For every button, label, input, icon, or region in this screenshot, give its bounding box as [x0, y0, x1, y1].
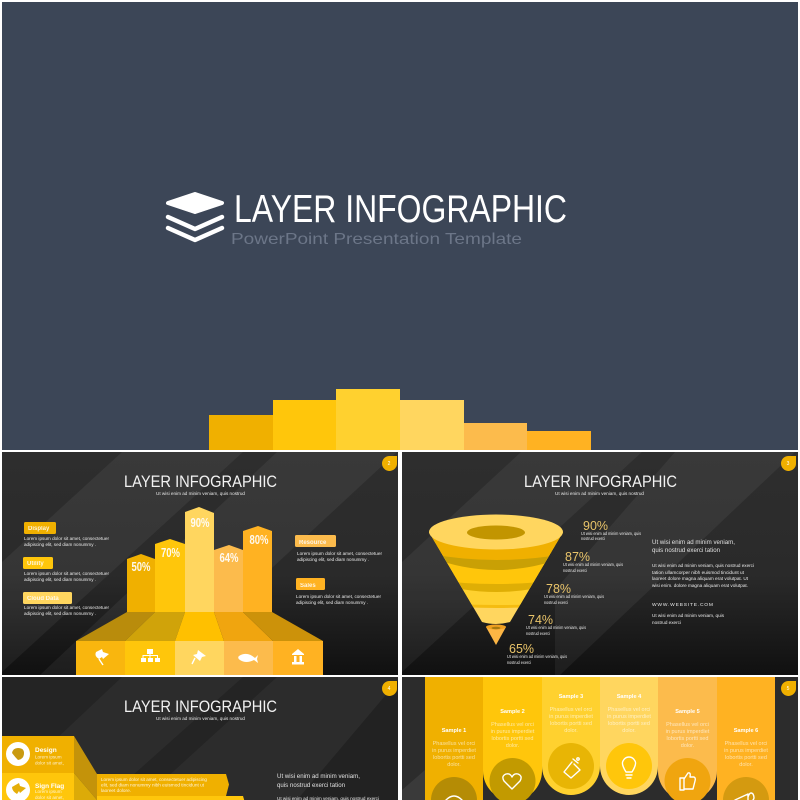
stat 78%: nostrud exerci	[544, 600, 568, 606]
label: Display: Lorem ipsum dolor sit amet, consectetuer	[24, 536, 109, 542]
label: Sales	[296, 578, 381, 606]
bar 50%	[127, 554, 155, 612]
column: Sample 4: in purus imperdiet	[607, 714, 651, 720]
stat 90%: nostrud exerci	[581, 536, 605, 542]
badge: slide number 4: 4	[388, 686, 391, 692]
badge: slide number 5: 5	[787, 686, 790, 692]
column: Sample 2: Sample 2	[500, 709, 525, 715]
label: Utility: adipiscing elit, sed diam nonummy .	[24, 577, 96, 583]
bar 90%: 90%	[190, 515, 210, 530]
stat 65%	[507, 644, 567, 664]
column: Sample 3	[542, 677, 600, 795]
column: Sample 1: lobortis portti sed	[433, 755, 475, 761]
panel: stair list slide	[2, 677, 398, 800]
bar 90%	[185, 507, 214, 612]
column: Sample 4: dolor.	[622, 728, 636, 734]
icon: airplane	[238, 654, 258, 663]
column: Sample 6: Sample 6	[734, 728, 758, 734]
side text block: wisi enim. dolore magna aliquam erat volutpat.	[652, 583, 748, 589]
badge: slide number 2: 2	[388, 461, 391, 467]
column: Sample 4: lobortis portti sed	[608, 721, 650, 727]
side text block: quis nostrud exerci tation	[652, 547, 720, 554]
label: Display	[24, 522, 109, 548]
arrow bar 1: laoreet dolore.	[101, 788, 131, 793]
icon: push pin	[192, 650, 206, 664]
label: Cloud Data	[23, 592, 109, 617]
side text block: Ut wisi enim ad minim veniam,	[652, 539, 735, 546]
side text block	[277, 773, 379, 800]
column: Sample 1: in purus imperdiet	[432, 748, 476, 754]
stat 87%: Ut wisi enim ad minim veniam, quis	[563, 562, 623, 568]
cover title: LAYER INFOGRAPHIC	[234, 188, 567, 231]
arrow bar 2	[97, 796, 246, 800]
label: Cloud Data: Cloud Data	[27, 596, 59, 602]
badge: slide number 3: 3	[787, 461, 790, 467]
column: Sample 4	[600, 677, 658, 795]
label: Resource: Resource	[299, 540, 327, 546]
column: Sample 3: Sample 3	[559, 694, 583, 700]
arrow bar 1	[97, 774, 229, 796]
panel: bar chart slide	[2, 452, 398, 675]
stat 74%: 74%	[528, 613, 553, 627]
stair step: Design: dolor sit amet,	[35, 760, 64, 766]
panel: sample columns slide	[402, 677, 798, 800]
title: LAYER INFOGRAPHIC	[524, 473, 677, 491]
funnel	[429, 514, 563, 645]
stat 87%: nostrud exerci	[563, 568, 587, 574]
column: Sample 5: Sample 5	[675, 709, 700, 715]
column: Sample 4: Phasellus vel orci	[608, 707, 650, 713]
bar 70%: 70%	[161, 545, 180, 560]
column: Sample 2: in purus imperdiet	[491, 729, 535, 735]
column: Sample 3: dolor.	[564, 728, 578, 734]
label: Display: adipiscing elit, sed diam nonummy .	[24, 542, 96, 548]
stair step: Sign Flag: Sign Flag	[35, 783, 64, 790]
column: Sample 2: lobortis portti sed	[492, 736, 533, 742]
front blocks	[76, 641, 323, 675]
column: Sample 6: lobortis portti sed	[725, 755, 767, 761]
label: Utility	[23, 557, 109, 583]
column: Sample 5: lobortis portti sed	[667, 736, 708, 742]
column: Sample 1: dolor.	[447, 762, 461, 768]
perspective floor	[76, 612, 323, 641]
stat 74%: Ut wisi enim ad minim veniam, quis	[526, 625, 586, 631]
badge: slide number 3	[781, 456, 796, 471]
bar 80%: 80%	[250, 532, 269, 547]
arrow bar 1: Lorem ipsum dolor sit amet, consectetuer adipiscing	[101, 777, 207, 782]
column: Sample 6: dolor.	[739, 762, 753, 768]
stat 78%: 78%	[546, 582, 571, 596]
stair step: Design: Lorem ipsum	[35, 754, 62, 760]
stat 65%: 65%	[509, 642, 534, 656]
arrow bar 1: elit, sed diam nonummy nibh euismod tincidunt ut	[101, 782, 205, 788]
badge: slide number 4	[382, 681, 397, 696]
column: Sample 3: Phasellus vel orci	[550, 707, 592, 713]
side text block: laoreet dolore magna aliquam erat volutpat. Ut	[652, 576, 749, 582]
cover subtitle: PowerPoint Presentation Template	[231, 231, 522, 248]
stat 90%: Ut wisi enim ad minim veniam, quis	[581, 531, 641, 537]
label: Sales: Sales	[300, 583, 316, 589]
side text block: Ut wisi enim ad minim veniam, quis nostrud exerci	[652, 563, 754, 569]
side text block: nostrud exerci	[652, 620, 681, 626]
stat 90%: 90%	[583, 519, 608, 533]
bar 80%	[243, 526, 272, 612]
subtitle: Ut wisi enim ad minim veniam, quis nostrud	[156, 716, 245, 722]
column: Sample 5: in purus imperdiet	[666, 729, 710, 735]
label: Sales: Lorem ipsum dolor sit amet, consectetuer	[296, 594, 381, 600]
column: Sample 2: dolor.	[506, 743, 520, 749]
column: Sample 6: in purus imperdiet	[724, 748, 768, 754]
panel: funnel slide	[402, 452, 798, 675]
title: LAYER INFOGRAPHIC	[124, 698, 277, 716]
icon: museum	[292, 649, 304, 664]
side text block	[652, 539, 754, 626]
label: Utility: Utility	[27, 561, 44, 567]
title: LAYER INFOGRAPHIC	[124, 473, 277, 491]
stat 90%	[581, 521, 641, 540]
stat 78%	[544, 584, 604, 604]
column: Sample 5	[658, 677, 717, 800]
column: Sample 1	[425, 677, 483, 800]
layered bar chart	[76, 507, 323, 675]
subtitle: Ut wisi enim ad minim veniam, quis nostrud	[555, 491, 644, 497]
subtitle: Ut wisi enim ad minim veniam, quis nostrud	[156, 491, 245, 497]
stair step: Sign Flag: dolor sit amet,	[35, 795, 64, 800]
badge: slide number 5	[781, 681, 796, 696]
cover bar steps	[209, 389, 591, 450]
column: Sample 3: lobortis portti sed	[550, 721, 592, 727]
label: Cloud Data: adipiscing elit, sed diam nonummy .	[24, 611, 96, 617]
column: Sample 2: Phasellus vel orci	[491, 722, 534, 728]
column: Sample 5: dolor.	[681, 743, 695, 749]
bar 64%: 64%	[220, 550, 239, 565]
label: Resource: adipiscing elit, sed diam nonummy .	[297, 557, 369, 563]
label: Utility: Lorem ipsum dolor sit amet, consectetuer	[24, 571, 109, 577]
side text block: Ut wisi enim ad minim veniam, quis	[652, 613, 725, 619]
column: Sample 2	[483, 677, 542, 800]
column: Sample 6	[717, 677, 775, 800]
stat 87%: 87%	[565, 550, 590, 564]
column: Sample 1: Phasellus vel orci	[433, 741, 475, 747]
stat 78%: Ut wisi enim ad minim veniam, quis	[544, 594, 604, 600]
column: Sample 5: Phasellus vel orci	[666, 722, 709, 728]
column: Sample 6: Phasellus vel orci	[725, 741, 767, 747]
side text block: WWW.WEBSITE.COM	[652, 602, 713, 608]
side text block: quis nostrud exerci tation	[277, 782, 345, 789]
stair step: Sign Flag: Lorem ipsum	[35, 789, 62, 794]
bar 50%: 50%	[132, 559, 151, 574]
column: Sample 4: Sample 4	[617, 694, 642, 700]
stat 87%	[563, 552, 623, 572]
column: Sample 1: Sample 1	[442, 728, 466, 734]
label: Display: Display	[28, 526, 50, 532]
badge: slide number 2	[382, 456, 397, 471]
label: Cloud Data: Lorem ipsum dolor sit amet, consectetuer	[24, 605, 109, 611]
icon: sign flag	[95, 649, 109, 665]
icon: layer stack	[168, 194, 222, 240]
icon: org chart	[141, 649, 160, 662]
side text block: Ut wisi enim ad minim veniam,	[277, 773, 360, 780]
bar 64%	[214, 545, 243, 612]
column: Sample 3: in purus imperdiet	[549, 714, 593, 720]
stair step: Sign Flag	[2, 773, 97, 800]
label: Resource: Lorem ipsum dolor sit amet, consectetuer	[297, 551, 382, 557]
bar 70%	[155, 539, 185, 612]
stat 65%: Ut wisi enim ad minim veniam, quis	[507, 654, 567, 660]
label: Resource	[295, 535, 382, 563]
stair step: Design: Design	[35, 747, 57, 754]
panel: cover slide	[2, 2, 798, 450]
stair step: Design	[2, 736, 97, 800]
stat 65%: nostrud exerci	[507, 660, 531, 666]
stat 74%: nostrud exerci	[526, 631, 550, 637]
label: Sales: adipiscing elit, sed diam nonummy .	[296, 600, 368, 606]
stat 74%	[526, 615, 586, 635]
side text block: tation ullamcorper nibh euismod tincidunt ut	[652, 570, 745, 576]
small cone	[486, 624, 506, 645]
